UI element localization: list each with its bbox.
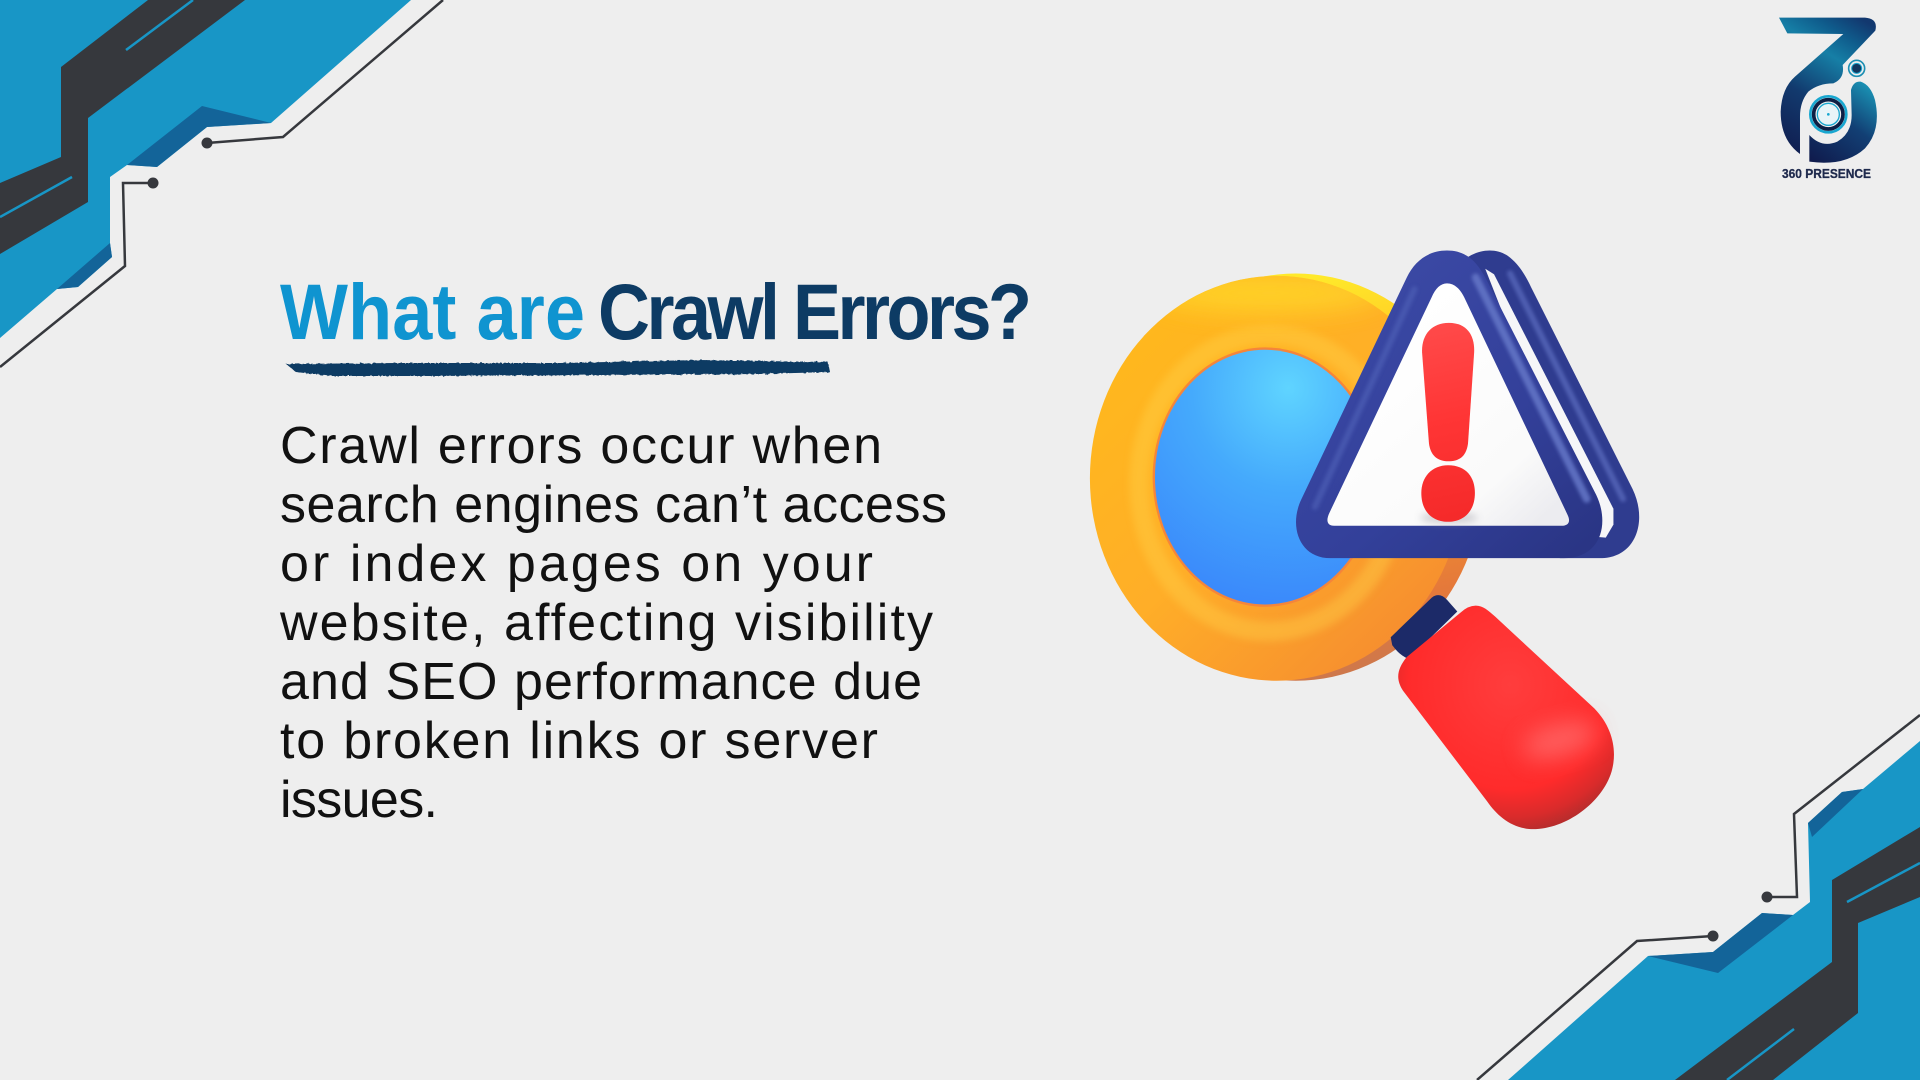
title: Crawl Errors? bbox=[598, 268, 1032, 357]
body text: search engines can’t access bbox=[280, 476, 947, 534]
warning triangle front bbox=[1296, 251, 1602, 558]
body text: issues. bbox=[280, 771, 438, 829]
exclamation mark bbox=[1420, 323, 1478, 523]
logo: 360 Presence bbox=[1779, 18, 1877, 181]
logo wordmark: 360 PRESENCE bbox=[1782, 167, 1871, 181]
body text: Crawl errors occur when bbox=[280, 417, 882, 475]
title underline brush stroke bbox=[286, 360, 830, 376]
illustration: magnifying glass with warning triangle bbox=[1090, 250, 1639, 829]
magnifier ring bbox=[1090, 273, 1483, 681]
body text: and SEO performance due bbox=[280, 653, 922, 711]
warning triangle back layer bbox=[1464, 250, 1639, 558]
magnifier collar bbox=[1391, 595, 1457, 659]
body text: website, affecting visibility bbox=[279, 594, 933, 652]
magnifier handle bbox=[1398, 606, 1614, 829]
body text: or index pages on your bbox=[280, 535, 873, 593]
corner decoration: top-left bbox=[0, 0, 443, 367]
logo mark bbox=[1779, 18, 1877, 163]
corner decoration: bottom-right bbox=[1477, 715, 1920, 1080]
title: What are bbox=[280, 268, 585, 357]
body text: to broken links or server bbox=[280, 712, 878, 770]
